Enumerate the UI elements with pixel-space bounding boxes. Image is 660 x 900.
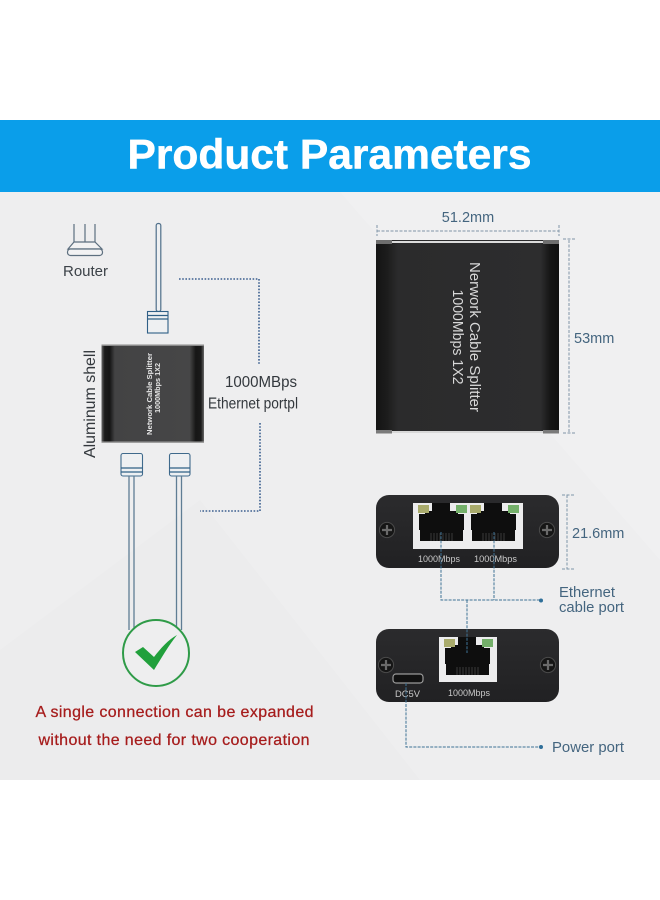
panel: connection diagram <box>36 224 314 749</box>
page background panel <box>0 192 660 780</box>
output connector right <box>170 454 190 630</box>
width dimension <box>377 210 559 236</box>
dotted leader lower <box>200 423 260 511</box>
height dimension ports: 21.6mm <box>572 526 624 542</box>
input cable <box>148 224 168 333</box>
caption <box>36 704 314 749</box>
caption: without the need for two cooperation <box>38 732 310 749</box>
device label large: Nerwork Cable Splitter <box>466 262 483 412</box>
ethernet cable port label: Ethernet <box>559 585 615 601</box>
height dimension <box>563 239 614 433</box>
router label: Router <box>63 263 108 280</box>
rear captions <box>395 688 490 699</box>
device label large <box>449 262 483 412</box>
leader power <box>406 683 543 749</box>
caption: A single connection can be expanded <box>36 704 314 721</box>
device label small: 1000Mbps 1X2 <box>153 363 162 413</box>
ethernet cable port label <box>559 585 624 616</box>
ethernet port label: 1000MBps <box>225 374 297 391</box>
panel: port views <box>376 495 624 756</box>
port captions: 1000Mbps <box>474 554 518 564</box>
icon: router <box>68 224 102 256</box>
power port label: Power port <box>552 740 624 756</box>
output connector left <box>121 454 142 630</box>
rear captions: 1000Mbps <box>448 688 490 698</box>
device front two ports <box>376 495 559 568</box>
ethernet port label: Ethernet portpl <box>208 396 298 412</box>
height dimension ports <box>562 495 624 569</box>
icon: green check <box>123 620 189 686</box>
port captions: 1000Mbps <box>418 554 460 564</box>
splitter device small <box>102 344 204 443</box>
device label small <box>145 353 162 435</box>
device label large: 1000Mbps 1X2 <box>449 290 466 384</box>
device label small: Network Cable Splitter <box>145 353 154 435</box>
ethernet port label <box>208 374 298 412</box>
dotted leader upper <box>179 279 259 364</box>
icon: usb c port <box>393 674 423 683</box>
port captions <box>418 554 518 564</box>
height dimension: 53mm <box>574 331 614 347</box>
device top view <box>376 240 559 434</box>
aluminum shell label: Aluminum shell <box>82 350 99 458</box>
panel: dimensions top view <box>376 210 614 434</box>
width dimension: 51.2mm <box>442 210 494 226</box>
header banner <box>0 120 660 192</box>
title: Product Parameters <box>128 130 532 178</box>
device rear single port <box>376 629 559 702</box>
ethernet cable port label: cable port <box>559 600 624 616</box>
leader ethernet <box>441 532 543 653</box>
rear captions: DC5V <box>395 689 420 699</box>
